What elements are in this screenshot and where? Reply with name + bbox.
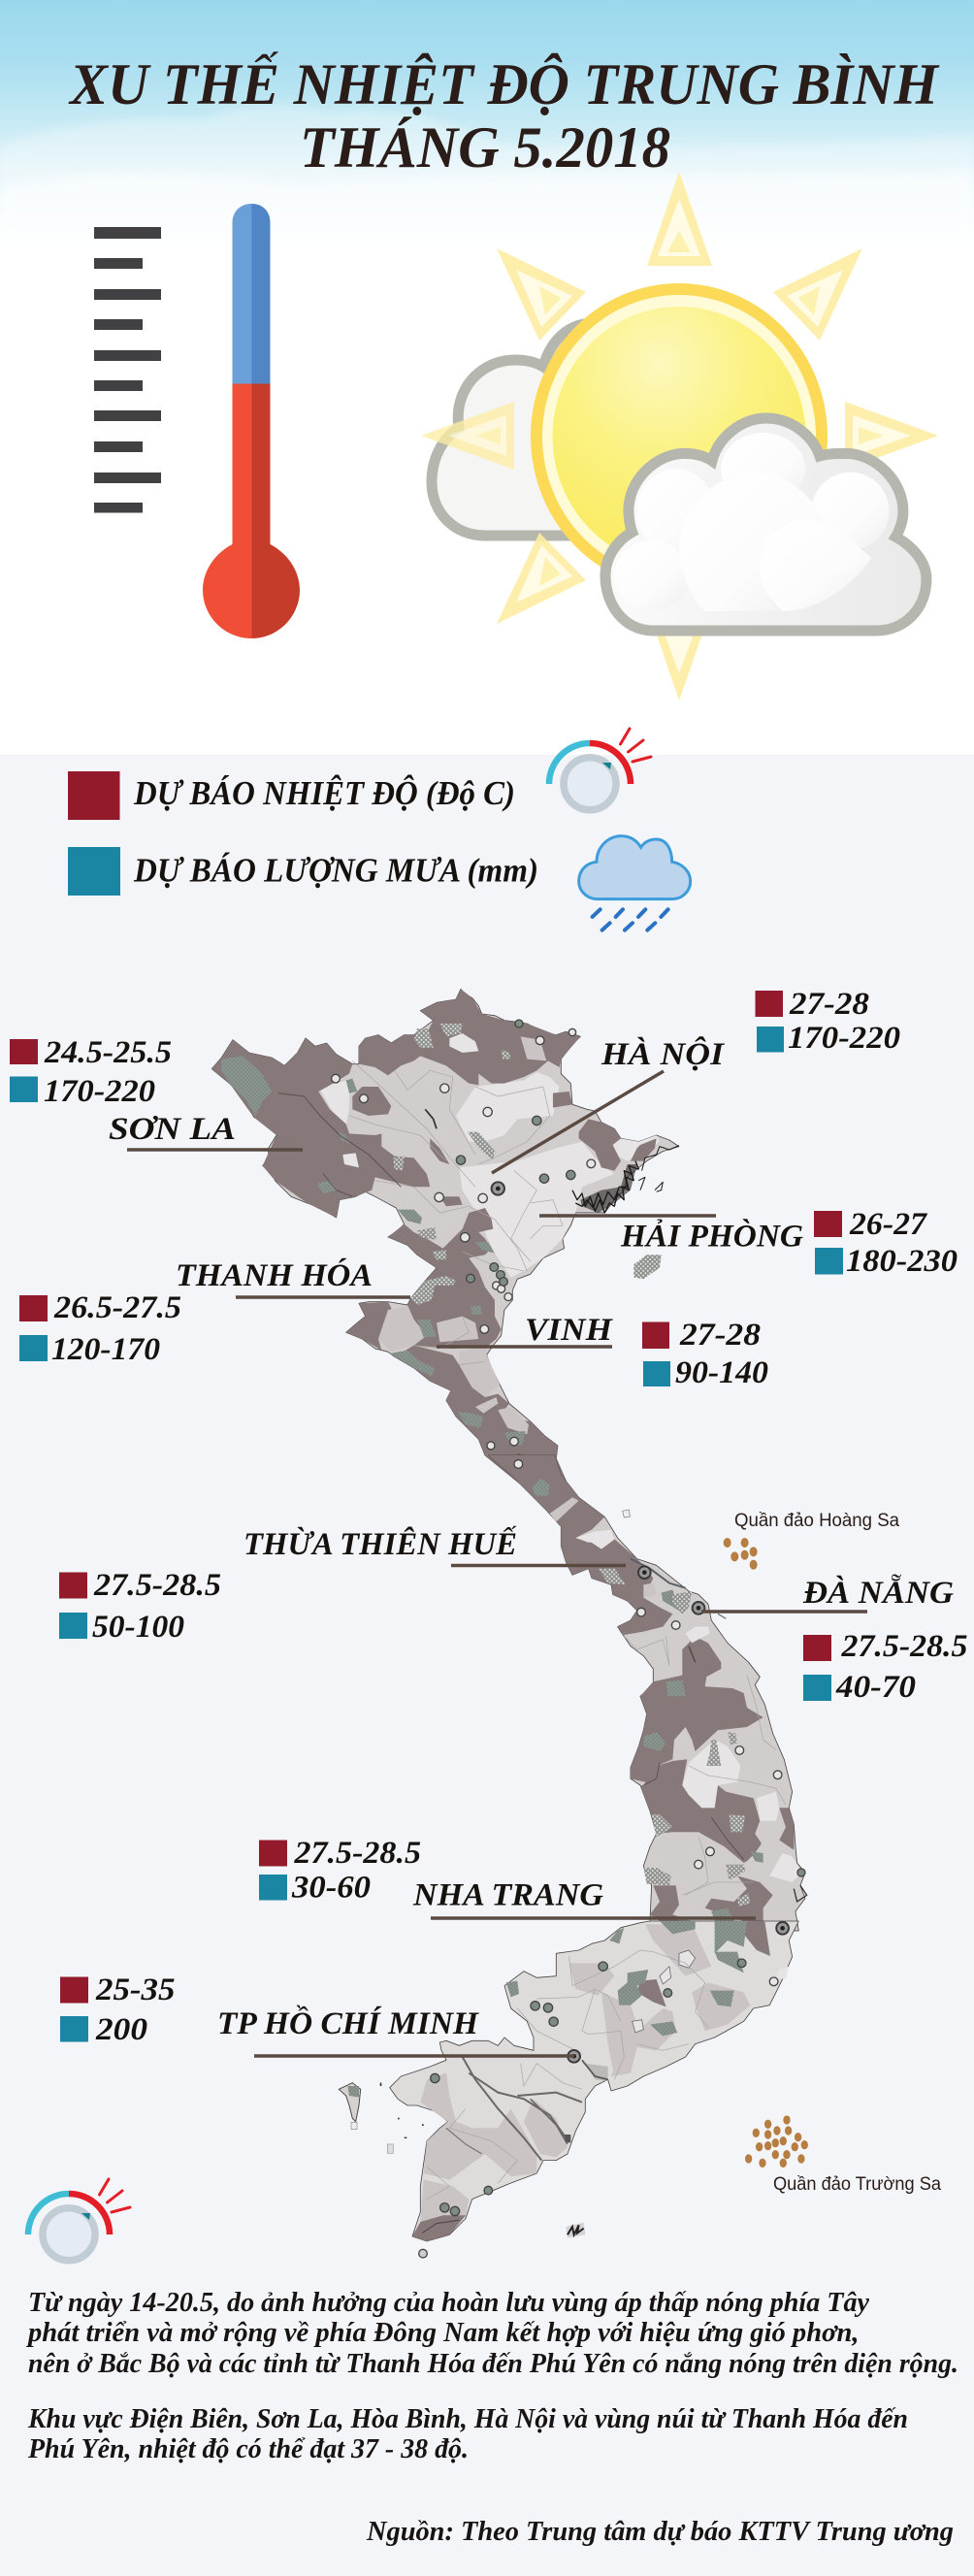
data: Đà Nẵng: 40-70: [835, 1670, 916, 1705]
data: Sơn La: 170-220: [44, 1074, 155, 1109]
map: northern Vietnam: [211, 989, 679, 1484]
front cloud: [605, 418, 926, 631]
legend: rainfall: [68, 847, 538, 896]
text block: peak temperatures: Phú Yên, nhiệt độ có thể đạt 37 - 38 độ.: [27, 2434, 469, 2464]
data: TP Hồ Chí Minh: 25-35: [95, 1973, 175, 2007]
data: Thanh Hóa: 120-170: [51, 1332, 160, 1367]
label: Hoàng Sa islands: Quần đảo Hoàng Sa: [734, 1511, 899, 1531]
Ha Long Bay coastline: [572, 1146, 679, 1213]
data: Sơn La: [10, 1035, 172, 1109]
data: Hải Phòng: [814, 1207, 958, 1279]
sky background: [0, 0, 974, 757]
city label: Đà Nẵng: ĐÀ NẴNG: [802, 1574, 954, 1611]
city label: Sơn La: SƠN LA: [109, 1112, 236, 1147]
map: southern Vietnam: [339, 1921, 798, 2258]
data: Nha Trang: [259, 1836, 421, 1906]
city label: Hà Nội: [492, 1035, 725, 1173]
title: [68, 52, 940, 179]
text block: peak temperatures: [27, 2404, 908, 2464]
data: Thanh Hóa: [19, 1290, 181, 1367]
data: Vinh: 90-140: [675, 1355, 768, 1390]
city label: Hải Phòng: HẢI PHÒNG: [620, 1217, 803, 1254]
data: Vinh: [642, 1318, 768, 1390]
data: Sơn La: 24.5-25.5: [44, 1035, 172, 1070]
text block: weather description: nên ở Bắc Bộ và các tỉnh từ Thanh Hóa đến Phú Yên có nắng nóng trên diện rộng.: [28, 2349, 958, 2379]
source: Nguồn: Theo Trung tâm dự báo KTTV Trung ương: [366, 2517, 954, 2547]
icon: lower temperature gauge: [28, 2179, 130, 2261]
legend: temperature: DỰ BÁO NHIỆT ĐỘ (Độ C): [133, 773, 515, 812]
label: Trường Sa islands: [745, 2115, 941, 2195]
legend: temperature: [68, 771, 515, 820]
data: Vinh: 27-28: [679, 1318, 761, 1353]
sun disc: [536, 289, 822, 584]
city label: Thừa Thiên Huế: THỪA THIÊN HUẾ: [244, 1525, 517, 1562]
text block: weather description: phát triển và mở rộng về phía Đông Nam kết hợp với hiệu ứng gió phơn,: [26, 2318, 859, 2348]
data: Nha Trang: 27.5-28.5: [293, 1836, 421, 1871]
title: XU THẾ NHIỆT ĐỘ TRUNG BÌNH: [68, 52, 940, 116]
city label: Nha Trang: NHA TRANG: [412, 1878, 603, 1913]
Phu Quoc island: [339, 2083, 361, 2122]
icon: sun behind clouds: [421, 172, 938, 701]
data: Hà Nội: [755, 987, 900, 1056]
data: Hải Phòng: 180-230: [846, 1244, 958, 1279]
label: Hoàng Sa islands: [724, 1511, 899, 1570]
data: Hà Nội: 170-220: [788, 1021, 900, 1056]
map: central Vietnam: [488, 1455, 807, 1931]
panel: lower background: [0, 755, 974, 2576]
data: Hà Nội: 27-28: [789, 987, 869, 1022]
city label: Thanh Hóa: THANH HÓA: [176, 1256, 373, 1293]
data: Thanh Hóa: 26.5-27.5: [53, 1290, 181, 1325]
text block: weather description: [26, 2288, 958, 2379]
back cloud: [432, 323, 640, 536]
data: Thừa Thiên Huế: 27.5-28.5: [93, 1568, 221, 1603]
city label: Vinh: VINH: [525, 1313, 613, 1348]
label: Trường Sa islands: Quần đảo Trường Sa: [773, 2174, 941, 2195]
data: Thừa Thiên Huế: 50-100: [92, 1610, 184, 1645]
data: Hải Phòng: 26-27: [849, 1207, 928, 1242]
icon: rain cloud: [579, 836, 691, 930]
title: THÁNG 5.2018: [300, 115, 670, 179]
data: Đà Nẵng: 27.5-28.5: [840, 1629, 968, 1664]
sun rays: [421, 172, 938, 701]
icon: temperature gauge: [549, 729, 651, 810]
text block: weather description: Từ ngày 14-20.5, do ảnh hưởng của hoàn lưu vùng áp thấp nóng phía Tây: [28, 2288, 870, 2318]
data: TP Hồ Chí Minh: 200: [95, 2012, 147, 2047]
icon: thermometer: [94, 204, 300, 638]
legend: rainfall: DỰ BÁO LƯỢNG MƯA (mm): [133, 852, 538, 889]
data: Nha Trang: 30-60: [291, 1871, 371, 1906]
data: TP Hồ Chí Minh: [60, 1973, 175, 2047]
city label: TP Hồ Chí Minh: TP HỒ CHÍ MINH: [217, 2004, 479, 2041]
city label: Hà Nội: HÀ NỘI: [601, 1035, 725, 1072]
data: Thừa Thiên Huế: [59, 1568, 221, 1645]
text block: peak temperatures: Khu vực Điện Biên, Sơn La, Hòa Bình, Hà Nội và vùng núi từ Thanh Hóa đến: [27, 2404, 908, 2434]
data: Đà Nẵng: [803, 1629, 968, 1705]
